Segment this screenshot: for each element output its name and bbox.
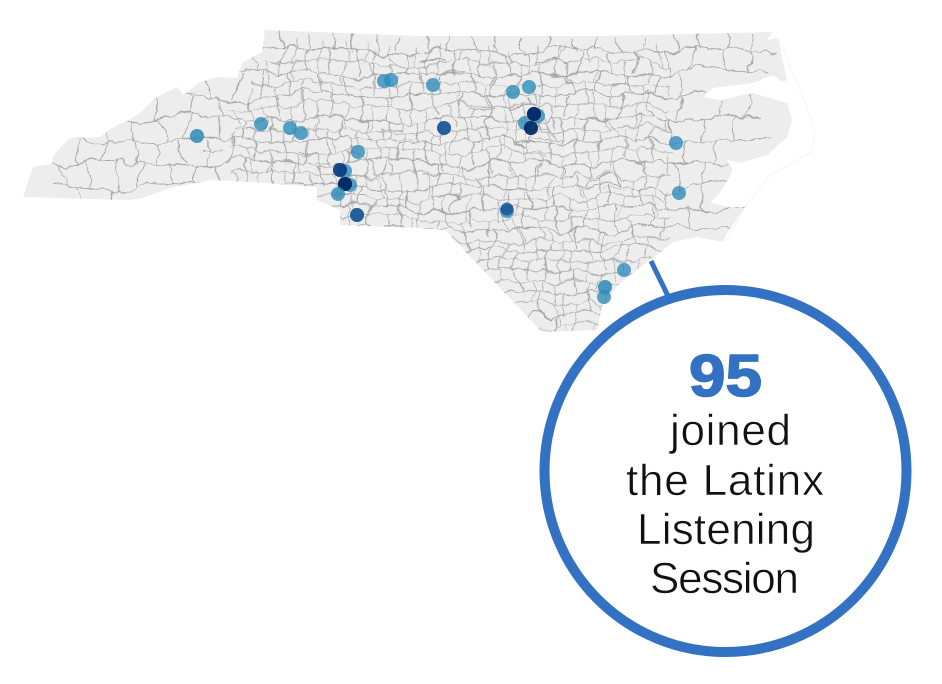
state land shape — [23, 30, 792, 332]
marker cluster east and south — [500, 136, 686, 304]
callout text: Listening — [637, 505, 815, 554]
marker cluster Triangle — [506, 80, 545, 135]
callout: circle — [544, 290, 906, 652]
map: North Carolina precincts — [23, 30, 815, 343]
marker cluster west — [190, 117, 308, 143]
callout text: joined — [668, 406, 791, 455]
outer banks coastline — [727, 38, 815, 240]
callout text: the Latinx — [626, 456, 824, 505]
map markers: listening session participants — [190, 73, 686, 304]
callout number: 95: 95 — [689, 343, 762, 409]
callout text: Session — [650, 554, 799, 603]
callout text — [626, 406, 824, 603]
callout: connector line — [651, 261, 668, 296]
marker cluster Charlotte — [331, 145, 365, 222]
marker cluster Triad — [377, 73, 451, 135]
precinct boundary lines — [50, 30, 789, 343]
